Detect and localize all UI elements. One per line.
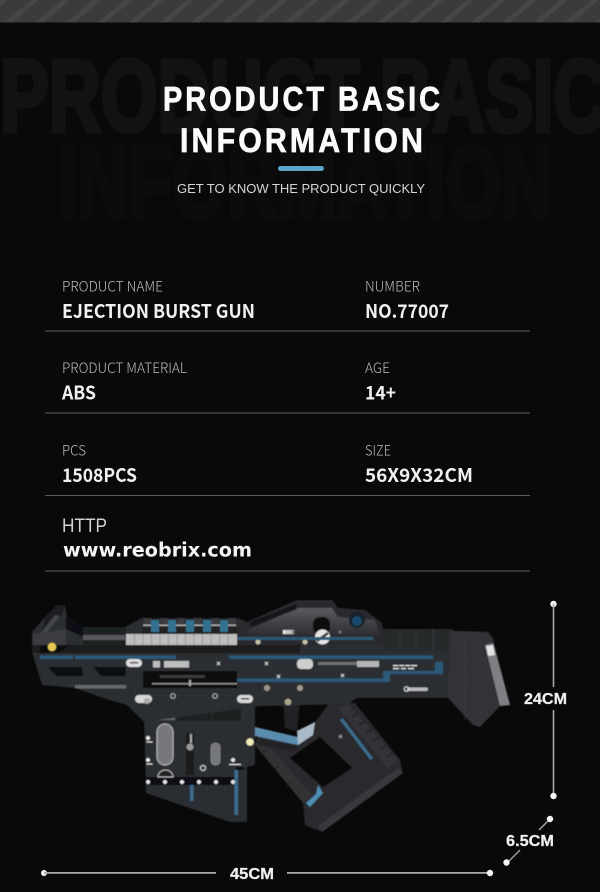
depth dimension: 6.5CM xyxy=(506,833,554,850)
row: material and age: 14+ xyxy=(365,378,396,406)
subtitle: GET TO KNOW THE PRODUCT QUICKLY xyxy=(177,181,425,196)
row: pieces and size: 56X9X32CM xyxy=(365,461,473,488)
row: material and age xyxy=(45,358,530,414)
depth dimension xyxy=(503,816,554,866)
folded stock frame xyxy=(255,702,403,832)
title: INFORMATION xyxy=(180,122,426,160)
height dimension xyxy=(524,601,567,799)
row: website xyxy=(45,516,530,572)
rear sight section xyxy=(237,600,383,645)
barrel shroud xyxy=(383,629,450,651)
height dimension: 24CM xyxy=(524,691,567,708)
row: pieces and size xyxy=(45,440,530,496)
side plates and dark window xyxy=(48,659,428,705)
ghost background title xyxy=(0,39,600,240)
info table xyxy=(45,276,530,572)
row: pieces and size: 1508PCS xyxy=(62,461,137,488)
row: website: HTTP xyxy=(62,516,107,537)
title xyxy=(163,80,443,160)
row: product name and number: EJECTION BURST GUN xyxy=(62,297,255,324)
rivet markers xyxy=(146,736,241,784)
blue light strips xyxy=(40,637,443,682)
row: pieces and size: PCS xyxy=(62,440,86,460)
accent bar xyxy=(278,166,324,171)
rear butt plate xyxy=(485,643,510,706)
width dimension xyxy=(41,866,493,883)
row: material and age: AGE xyxy=(365,358,390,378)
row: product name and number: PRODUCT NAME xyxy=(62,276,163,296)
grip and magazine housing xyxy=(144,704,255,822)
top striped band xyxy=(0,0,600,22)
top rail and white blocks xyxy=(32,618,300,653)
row: website: www.reobrix.com xyxy=(63,538,252,562)
product illustration: blaster xyxy=(32,600,510,832)
row: material and age: ABS xyxy=(61,378,96,406)
row: pieces and size: SIZE xyxy=(365,440,391,460)
row: product name and number: NO.77007 xyxy=(365,297,449,324)
title: PRODUCT BASIC xyxy=(163,80,443,118)
row: product name and number: NUMBER xyxy=(365,276,420,296)
width dimension: 45CM xyxy=(230,866,274,883)
row: material and age: PRODUCT MATERIAL xyxy=(62,358,187,378)
main receiver body xyxy=(32,600,510,727)
row: product name and number xyxy=(45,276,530,332)
trigger xyxy=(283,700,300,731)
